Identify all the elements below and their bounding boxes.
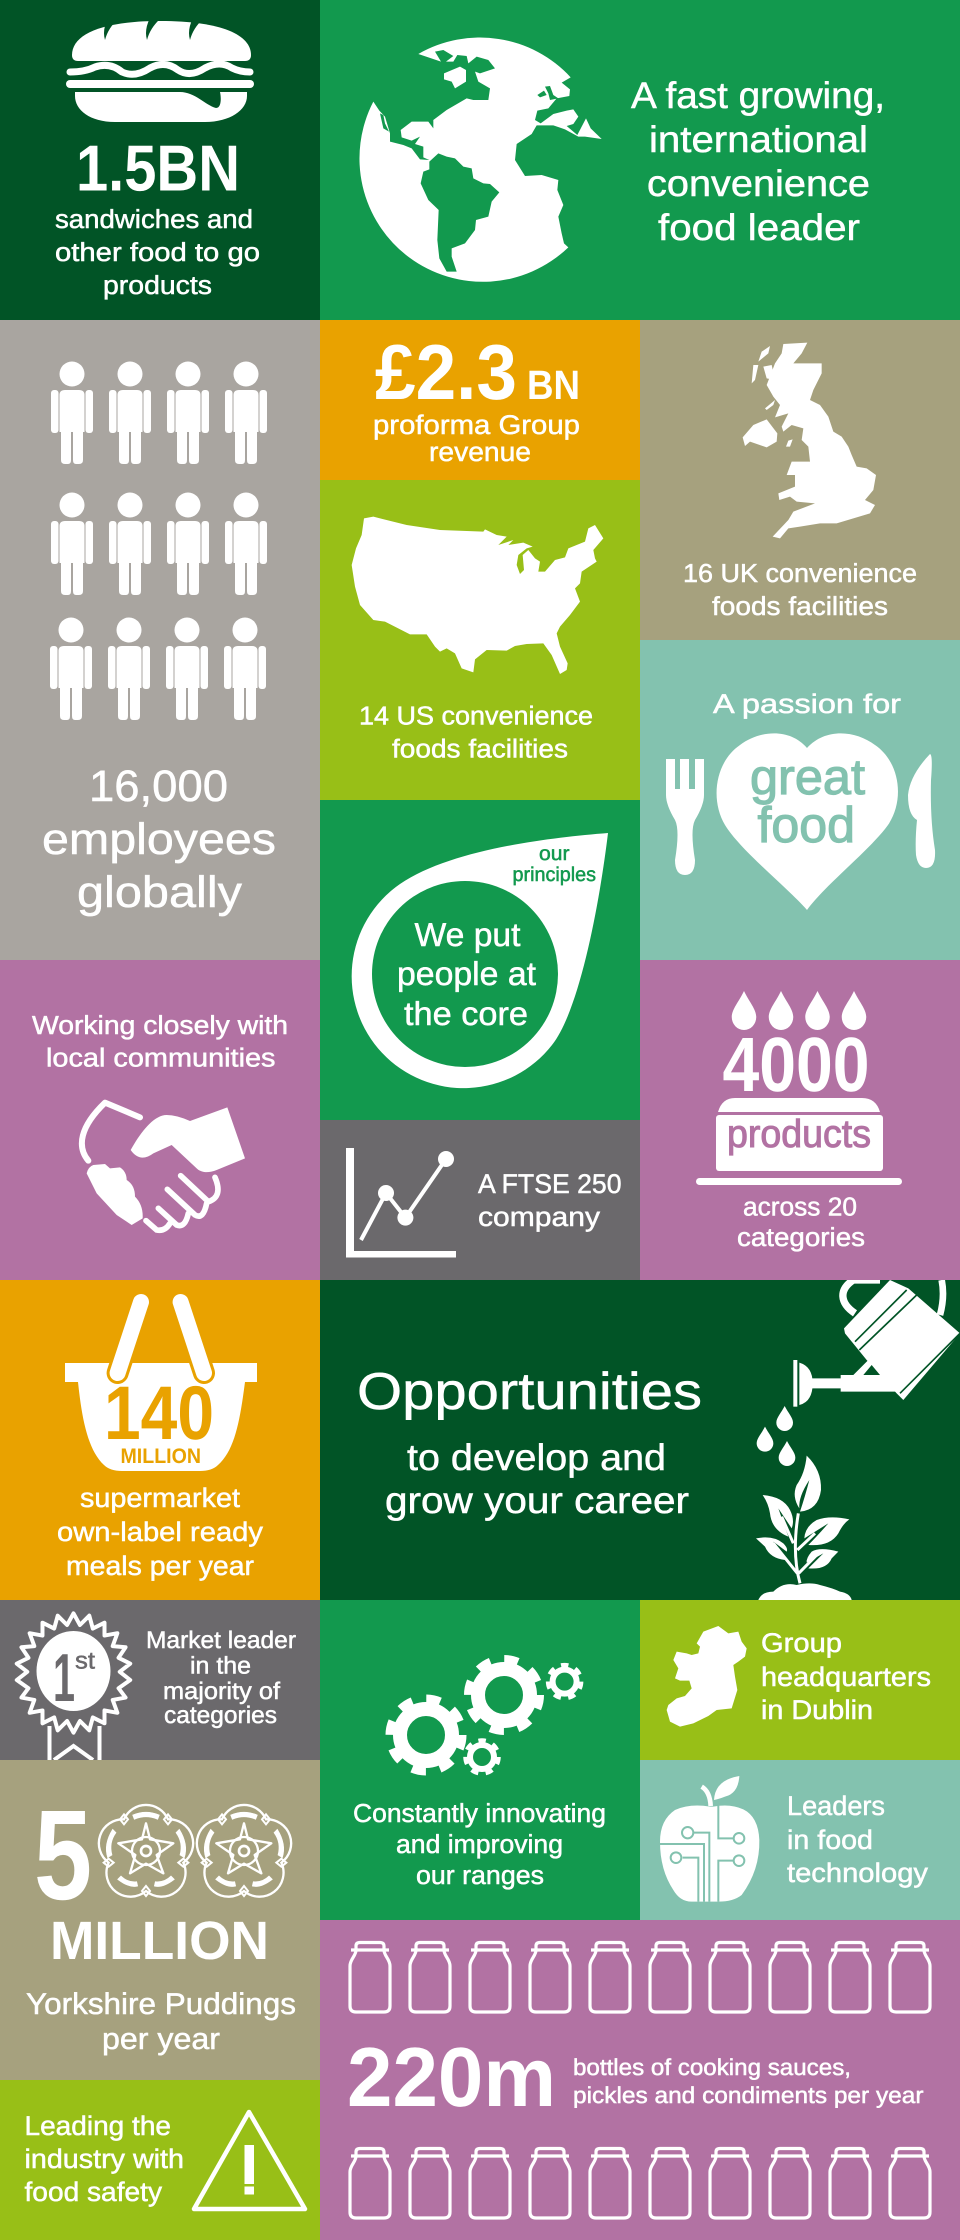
stat: 1.5BN: 1.5BN — [76, 132, 240, 204]
panel: revenue — [320, 320, 640, 480]
text: working closely with local communities: local communities — [46, 1042, 276, 1072]
text: bottles of cooking sauces: bottles of cooking sauces, — [573, 2054, 851, 2080]
text: 1st: st — [75, 1648, 95, 1674]
panel: innovating — [320, 1600, 640, 1920]
heading: a fast growing: A fast growing, — [631, 75, 885, 116]
text: across 20 categories: across 20 — [743, 1192, 857, 1222]
text: sandwiches and other food to go products — [55, 204, 260, 300]
panel: yorkshire puddings — [0, 1760, 320, 2080]
stat: 220m: 220m — [347, 2030, 556, 2124]
text: constantly innovating and improving our ranges: and improving — [396, 1829, 563, 1859]
stat: 4000: 4000 — [722, 1022, 870, 1108]
panel: headquarters — [640, 1600, 960, 1760]
panel: our principles — [320, 800, 640, 1120]
icon: UK map — [743, 343, 876, 538]
icon: shopping basket — [65, 1302, 257, 1471]
icon: jars top row — [350, 1942, 930, 2012]
icon: warning triangle — [194, 2112, 305, 2209]
icon: handshake — [82, 1103, 245, 1230]
text: market leader in the majority of categories: Market leader — [146, 1627, 296, 1654]
icon: jars bottom row — [350, 2148, 930, 2218]
icon: watering can — [793, 1280, 960, 1407]
text: proforma group revenue — [373, 410, 580, 467]
text: 14 US convenience foods facilities — [359, 700, 593, 764]
text: 16 UK convenience foods facilities — [683, 558, 917, 621]
icon: circuit apple — [660, 1776, 759, 1902]
text: sandwiches and other food to go products: sandwiches and — [55, 204, 253, 234]
heading: a fast growing: food leader — [658, 207, 860, 248]
heading: opportunities: Opportunities — [357, 1363, 702, 1421]
text: great food: great — [750, 749, 865, 805]
stat: million: MILLION — [50, 1911, 269, 1971]
heading: a fast growing: international — [649, 119, 868, 160]
text: 16,000 employees globally — [42, 762, 276, 917]
text: supermarket own-label ready meals per year — [57, 1483, 264, 1581]
text: 16,000 employees globally: employees — [42, 815, 276, 864]
text: group headquarters in Dublin: in Dublin — [761, 1695, 873, 1725]
text: a FTSE 250 company: company — [478, 1202, 601, 1232]
text: supermarket own-label ready meals per year: supermarket — [80, 1483, 241, 1513]
text: 14 US convenience foods facilities: 14 US convenience — [359, 700, 593, 730]
icon: USA map — [352, 517, 603, 674]
text: constantly innovating and improving our ranges: Constantly innovating — [353, 1798, 606, 1828]
text: 16 UK convenience foods facilities: foods facilities — [712, 591, 888, 621]
icon: seedling — [756, 1456, 852, 1600]
panel: opportunities — [320, 1280, 960, 1600]
panel: communities — [0, 960, 320, 1280]
icon: gears — [390, 1659, 581, 1774]
text: to develop and grow your career — [385, 1437, 689, 1521]
text: leading the industry with food safety: food safety — [24, 2177, 163, 2207]
icon: rosette — [17, 1613, 130, 1760]
panel: market leader — [0, 1600, 320, 1760]
text: leaders in food technology: technology — [787, 1858, 929, 1888]
icon: yorkshire roses — [99, 1805, 291, 1897]
text: great food: food — [758, 797, 855, 853]
text: market leader in the majority of categories: categories — [164, 1702, 277, 1729]
text: leaders in food technology: in food — [787, 1825, 873, 1855]
text: group headquarters in Dublin: headquarters — [761, 1662, 931, 1692]
text: products: products — [727, 1113, 871, 1156]
icon: cake — [696, 1098, 902, 1185]
stat: £2.3BN: BN — [527, 362, 580, 408]
icon: heart — [717, 733, 898, 910]
text: leaders in food technology — [787, 1791, 929, 1888]
stat: 140 million: MILLION — [120, 1445, 201, 1468]
text: to develop and grow your career: grow your career — [385, 1480, 689, 1521]
text: proforma group revenue: revenue — [429, 437, 531, 467]
text: our principles: our — [539, 843, 570, 865]
text: across 20 categories: categories — [737, 1222, 865, 1252]
text: market leader in the majority of categories — [146, 1627, 296, 1729]
text: working closely with local communities — [32, 1010, 288, 1072]
panel: employees — [0, 320, 320, 960]
text: leading the industry with food safety: Leading the — [24, 2111, 171, 2141]
icon: line chart — [346, 1148, 456, 1258]
text: 16,000 employees globally: globally — [77, 868, 242, 917]
icon: inner circle — [372, 881, 558, 1067]
text: constantly innovating and improving our ranges: our ranges — [416, 1860, 544, 1890]
text: supermarket own-label ready meals per year: meals per year — [66, 1551, 254, 1581]
panel: 4000 products — [640, 960, 960, 1280]
text: market leader in the majority of categories: majority of — [163, 1678, 280, 1705]
panel: international leader — [320, 0, 960, 320]
icon: Ireland map — [667, 1626, 747, 1727]
stat: 140 million: 140 — [104, 1371, 214, 1456]
text: 14 US convenience foods facilities: foods facilities — [392, 734, 568, 764]
stat: £2.3BN: £2.3 — [375, 328, 517, 416]
text: yorkshire puddings per year: Yorkshire Puddings — [26, 1988, 296, 2021]
text: across 20 categories — [737, 1192, 865, 1252]
text: leading the industry with food safety: industry with — [24, 2144, 184, 2174]
stat: 5: 5 — [34, 1784, 92, 1927]
panel: bottles — [320, 1920, 960, 2240]
text: leading the industry with food safety — [24, 2111, 184, 2207]
text: to develop and grow your career: to develop and — [407, 1437, 666, 1478]
text: leaders in food technology: Leaders — [787, 1791, 885, 1821]
text: proforma group revenue: proforma Group — [373, 410, 580, 440]
text: bottles of cooking sauces — [573, 2054, 924, 2108]
text: constantly innovating and improving our ranges — [353, 1798, 606, 1890]
text: 1st: 1 — [53, 1640, 75, 1716]
icon: leaf badge — [352, 833, 608, 1088]
text: great food — [750, 749, 865, 853]
panel: passion for great food — [640, 640, 960, 960]
text: sandwiches and other food to go products: other food to go — [55, 237, 260, 267]
icon: candle flames — [732, 991, 866, 1030]
panel: food technology — [640, 1760, 960, 1920]
icon: fork — [666, 759, 704, 875]
text: working closely with local communities: Working closely with — [32, 1010, 288, 1040]
text: 16,000 employees globally: 16,000 — [89, 762, 228, 811]
icon: people grid — [50, 362, 267, 720]
text: market leader in the majority of categories: in the — [190, 1652, 251, 1680]
text: a FTSE 250 company — [478, 1169, 622, 1232]
text: sandwiches and other food to go products: products — [103, 270, 212, 300]
text: we put people at the core — [397, 916, 536, 1032]
icon: globe — [359, 38, 602, 282]
text: yorkshire puddings per year — [26, 1988, 296, 2056]
text: a passion for: A passion for — [713, 689, 901, 719]
text: we put people at the core: We put — [414, 916, 520, 953]
text: group headquarters in Dublin — [761, 1628, 931, 1725]
panel: food safety — [0, 2080, 320, 2240]
panel: sandwiches — [0, 0, 320, 320]
panel: UK facilities — [640, 320, 960, 640]
text: we put people at the core: people at — [397, 955, 536, 992]
panel: US facilities — [320, 480, 640, 800]
heading: a fast growing: convenience — [647, 163, 870, 204]
icon: knife — [908, 754, 935, 868]
text: we put people at the core: the core — [404, 995, 528, 1032]
text: our principles — [512, 843, 596, 886]
text: supermarket own-label ready meals per year: own-label ready — [57, 1517, 264, 1547]
text: 16 UK convenience foods facilities: 16 UK convenience — [683, 558, 917, 588]
text: group headquarters in Dublin: Group — [761, 1628, 842, 1658]
icon: sandwich — [66, 18, 254, 122]
panel: FTSE 250 — [320, 1120, 640, 1280]
text: a FTSE 250 company: A FTSE 250 — [478, 1169, 622, 1199]
text: bottles of cooking sauces: pickles and condiments per year — [573, 2082, 924, 2108]
text: yorkshire puddings per year: per year — [102, 2023, 220, 2056]
text: our principles: principles — [512, 864, 596, 886]
panel: ready meals — [0, 1280, 320, 1600]
heading: a fast growing — [631, 75, 885, 248]
icon: water drops — [757, 1406, 795, 1466]
